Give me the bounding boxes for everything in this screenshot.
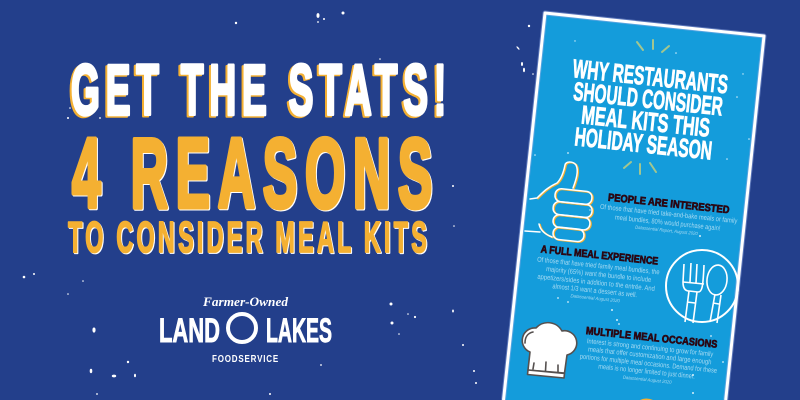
- icon: fork and spoon in circle: [666, 250, 738, 323]
- icon: thumbs up: [525, 162, 594, 243]
- logo: land o lakes foodservice: LAKES: [266, 312, 332, 350]
- section: people are interested: PEOPLE ARE INTERESTED: [607, 192, 730, 216]
- section: people are interested: Datassential Report, August 2020: [635, 225, 698, 236]
- heading: to consider meal kits: TO CONSIDER MEAL KITS: [68, 213, 430, 262]
- panel speckles: [534, 40, 750, 394]
- section: a full meal experience: appetizers/sides in addition to the entrée. And: [537, 274, 655, 293]
- heading: to consider meal kits: TO CONSIDER MEAL KITS: [69, 214, 431, 263]
- heading: get the stats: GET THE STATS!: [69, 53, 450, 132]
- heading: get the stats: [69, 52, 452, 132]
- heading: 4 reasons: 4 REASONS: [73, 119, 441, 229]
- section: multiple meal occasions: portions for multiple meal occasions. Demand for these: [579, 354, 717, 375]
- panel title: HOLIDAY SEASON: [573, 121, 714, 166]
- section: a full meal experience: majority (65%) want the bundle to include: [546, 266, 652, 284]
- panel title: MEAL KITS THIS: [580, 99, 711, 143]
- icon: chef hat: [522, 323, 577, 378]
- section: multiple meal occasions: [578, 325, 720, 389]
- section: multiple meal occasions: MULTIPLE MEAL OCCASIONS: [585, 325, 718, 351]
- section: multiple meal occasions: Interest is strong and continuing to grow for family: [587, 338, 714, 358]
- section: multiple meal occasions: meals that offer customization and large enough: [588, 346, 712, 366]
- section: multiple meal occasions: meals is no longer limited to just dinner.: [598, 364, 695, 381]
- panel: infographic preview: [504, 13, 764, 400]
- heading: to consider meal kits: [68, 213, 431, 263]
- icon: bottom sunburst ticks: [624, 162, 656, 174]
- section: a full meal experience: almost 1/3 want a dessert as well.: [552, 283, 637, 299]
- panel title: [564, 53, 730, 167]
- section: multiple meal occasions: Datassential August 2020: [623, 375, 672, 385]
- section: people are interested: Of those that have tried take-and-bake meals or family: [600, 204, 738, 225]
- logo: land o lakes foodservice: LAND: [159, 312, 220, 350]
- logo: land o lakes foodservice: Farmer-Owned: [202, 294, 289, 309]
- icon: partial yellow arc at bottom: [640, 398, 653, 400]
- heading: 4 reasons: [72, 118, 441, 229]
- heading: 4 reasons: 4 REASONS: [72, 118, 440, 228]
- heading: get the stats: GET THE STATS!: [71, 52, 452, 130]
- section: a full meal experience: Datassential August 2020: [570, 293, 620, 303]
- section: people are interested: meal bundles, 80% would purchase again!: [615, 214, 721, 233]
- section: a full meal experience: Of those that have tried family meal bundles, the: [537, 257, 660, 276]
- section: a full meal experience: A FULL MEAL EXPERIENCE: [540, 243, 659, 268]
- section: a full meal experience: [534, 243, 661, 307]
- section: people are interested: [598, 191, 739, 240]
- icon: top sunburst ticks: [637, 40, 669, 52]
- logo: land o lakes foodservice: [159, 294, 332, 365]
- logo: land o lakes foodservice: FOODSERVICE: [212, 354, 279, 365]
